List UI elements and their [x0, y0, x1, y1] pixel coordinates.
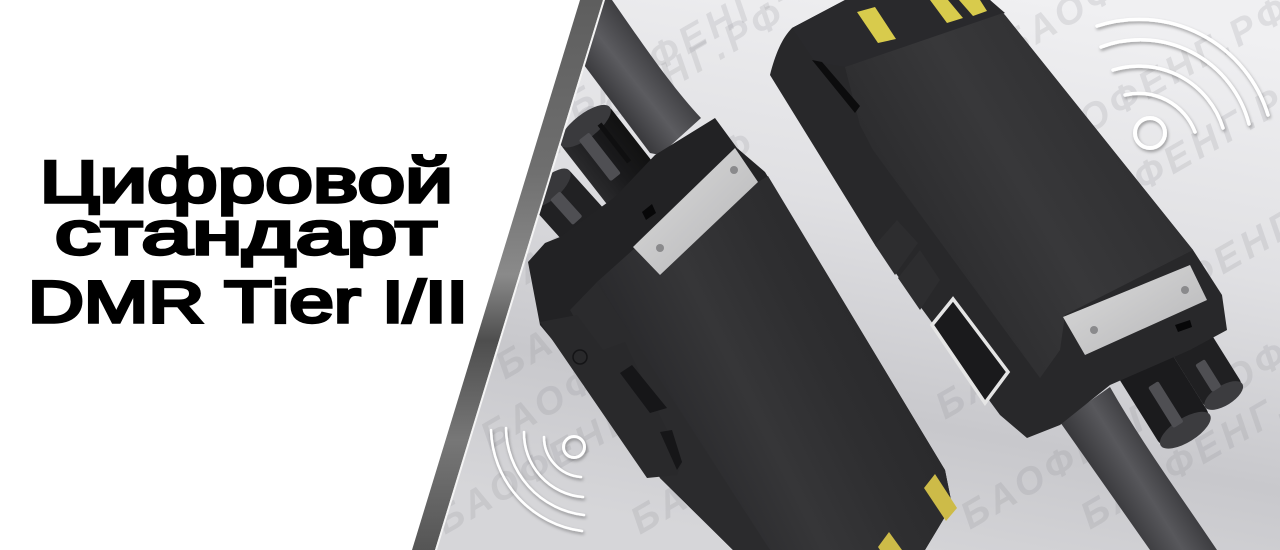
- radio head and side: [528, 118, 952, 550]
- title line 2: стандарт: [55, 200, 437, 267]
- side button one: [875, 245, 896, 275]
- watermark pattern: БАОФЕНГ.РФ: [488, 202, 769, 388]
- strip between panel and cover: [570, 282, 770, 550]
- left radio: [523, 0, 957, 550]
- watermark pattern: БАОФЕНГ.РФ: [624, 357, 904, 543]
- lower knob: [538, 168, 602, 238]
- side key panel: [550, 338, 682, 478]
- title line 1: Ц ифровой: [40, 147, 453, 216]
- background: grey photo panel: [400, 0, 1280, 550]
- knob one: [1120, 357, 1211, 449]
- icon: signal waves top right: [1097, 19, 1268, 148]
- watermark pattern: БАОФЕНГ.РФ: [428, 357, 709, 543]
- watermark pattern: [428, 0, 1280, 543]
- PTT window: [932, 299, 1008, 403]
- gold contact middle: [930, 0, 963, 23]
- radio body: [770, 0, 1227, 438]
- stripe highlight: [435, 0, 605, 550]
- watermark pattern: БАОФЕНГ.РФ: [954, 352, 1234, 538]
- gold contact left: [857, 7, 896, 43]
- battery slot: [812, 60, 860, 113]
- title line 3: DMR T ier I/II: [28, 268, 468, 335]
- title: [28, 147, 468, 335]
- gold contact upper: [924, 474, 957, 521]
- upper knob: [560, 104, 651, 204]
- watermark pattern: БАОФЕНГ.РФ: [928, 242, 1209, 428]
- knob two: [1174, 337, 1244, 410]
- antenna: [1060, 387, 1217, 550]
- diagonal grey stripe: [412, 0, 603, 550]
- gold contact right: [959, 0, 987, 16]
- right radio: [770, 0, 1248, 550]
- gold contact lower: [878, 532, 902, 550]
- metal plate: [1063, 265, 1207, 355]
- metal plate: [633, 148, 758, 275]
- watermark pattern: БАОФЕНГ.РФ: [474, 272, 754, 458]
- speaker slot: [642, 204, 656, 220]
- contact band: [792, 0, 1005, 28]
- battery cover: [845, 13, 1193, 378]
- side button two: [898, 277, 922, 310]
- watermark pattern: БАОФЕНГ.РФ: [484, 122, 764, 308]
- battery cover: [597, 176, 952, 550]
- antenna: [584, 0, 701, 155]
- speaker slot: [1175, 320, 1192, 332]
- icon: signal waves bottom left: [491, 428, 584, 531]
